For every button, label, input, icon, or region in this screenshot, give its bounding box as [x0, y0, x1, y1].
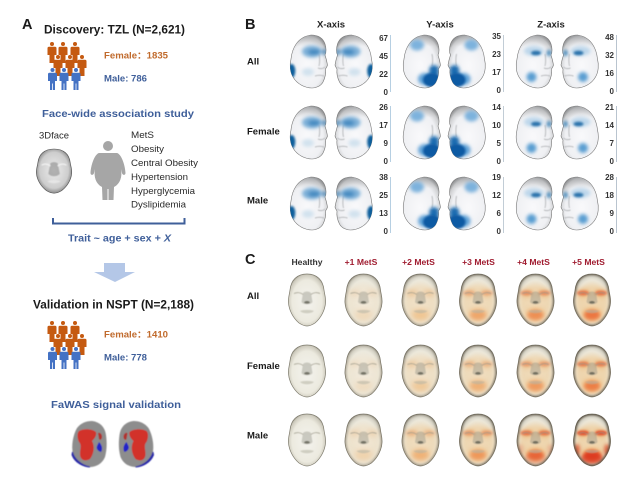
panel letter B: B: [245, 17, 255, 33]
colour scales: Z-axis: 0: [610, 227, 615, 236]
face: Female Healthy: [288, 345, 326, 397]
panel letter A: A: [22, 17, 33, 33]
faces: Y-axis Male mirrored: [448, 177, 485, 230]
faces: Y-axis All mirrored: [448, 35, 485, 88]
icon: discovery cohort people: [48, 42, 86, 90]
colour scales: Y-axis: 5: [497, 139, 502, 148]
panel letter C: C: [245, 252, 256, 268]
face: Male Healthy: [288, 414, 326, 466]
heading: FaWAS signal validation: FaWAS signal validation: [51, 399, 181, 411]
colour scales: Z-axis: 18: [605, 191, 615, 200]
colour scales: Y-axis: 6: [497, 209, 502, 218]
row label: Male: Male: [247, 430, 268, 442]
colour scales: Y-axis: 17: [492, 68, 502, 77]
face: Male +4: [517, 414, 554, 466]
colour scales: Y-axis: 0: [497, 227, 502, 236]
faces: X-axis Male: [288, 177, 328, 230]
colour scales: Y-axis: 0: [497, 86, 502, 95]
column header: +3 MetS: +3 MetS: [462, 257, 495, 267]
faces: Z-axis All: [516, 35, 554, 88]
face: Male +2: [402, 414, 439, 466]
colour scales: Y-axis: 10: [492, 121, 502, 130]
list: metabolic traits: Central Obesity: [131, 158, 198, 169]
colour scales: Y-axis: 35: [492, 32, 502, 41]
icon: validation cohort people: [48, 321, 86, 369]
list: metabolic traits: [131, 130, 198, 210]
face: Male +1: [345, 414, 382, 466]
colour scales: X-axis: 9: [384, 139, 389, 148]
faces: Y-axis Female mirrored: [448, 106, 485, 159]
list: metabolic traits: Dyslipidemia: [131, 200, 187, 210]
face: All +5: [573, 274, 611, 326]
colour scales: X-axis: 13: [379, 209, 389, 218]
column header: X-axis: X-axis: [317, 20, 345, 30]
colour scales: X-axis: 26: [379, 103, 389, 112]
face: All +3: [459, 274, 497, 326]
row label: Female: Female: [247, 126, 280, 138]
colour scales: X-axis: 0: [384, 88, 389, 97]
colour scales: Z-axis: 9: [610, 209, 615, 218]
column header: +2 MetS: +2 MetS: [402, 257, 435, 267]
colour scales: X-axis: 38: [379, 173, 389, 182]
face: Female +2: [402, 345, 439, 397]
icon: obese body silhouette: [90, 141, 126, 200]
list: metabolic traits: Obesity: [131, 144, 164, 155]
faces: X-axis Female mirrored: [335, 106, 375, 159]
column header: Healthy: Healthy: [291, 257, 323, 267]
colour scales: Z-axis: 21: [605, 103, 615, 112]
colour scales: Y-axis: 0: [497, 157, 502, 166]
colour scales: X-axis: 25: [379, 191, 389, 200]
heading: face-wide association study: Face-wide association study: [42, 108, 194, 120]
faces: Z-axis Female mirrored: [561, 106, 598, 159]
faces: X-axis All: [288, 35, 328, 88]
colour scales: Z-axis: 28: [605, 173, 615, 182]
label: male count: Male: 786: [104, 74, 147, 84]
colour scales: X-axis: [379, 34, 390, 236]
colour scales: Z-axis: 7: [610, 139, 615, 148]
colour scales: Z-axis: 32: [605, 51, 615, 60]
column header: Z-axis: Z-axis: [537, 20, 565, 30]
column header: +1 MetS: +1 MetS: [345, 257, 378, 267]
label: validation female count: Female：1410: [104, 330, 168, 340]
column header: +4 MetS: +4 MetS: [517, 257, 550, 267]
colour scales: Y-axis: 19: [492, 173, 502, 182]
colour scales: Z-axis: 0: [610, 157, 615, 166]
column header: +5 MetS: +5 MetS: [572, 257, 605, 267]
faces: X-axis Female: [288, 106, 328, 159]
colour scales: Y-axis: [492, 32, 504, 236]
face: Female +3: [459, 345, 497, 397]
colour scales: Z-axis: [605, 33, 616, 236]
face: Male +5: [573, 414, 611, 466]
row label: All: All: [247, 291, 259, 302]
colour scales: X-axis: 22: [379, 70, 389, 79]
faces: Z-axis All mirrored: [561, 35, 598, 88]
panel A: study design: [22, 17, 198, 467]
face: All +4: [517, 274, 554, 326]
face: All +1: [345, 274, 382, 326]
colour scales: Z-axis: 16: [605, 69, 615, 78]
list: metabolic traits: MetS: [131, 130, 154, 141]
faces: X-axis Male mirrored: [335, 177, 375, 230]
heading: validation cohort: Validation in NSPT (N=2,188): [33, 298, 194, 312]
list: metabolic traits: Hypertension: [131, 172, 188, 183]
colour scales: Z-axis: 48: [605, 33, 615, 42]
faces: Y-axis Male: [403, 177, 441, 230]
faces: Z-axis Male: [516, 177, 554, 230]
formula: Trait ~ age + sex + X: [68, 234, 172, 244]
panel B: axis association maps: [245, 17, 616, 236]
face: Female +4: [517, 345, 554, 397]
label: female count: Female：1835: [104, 50, 168, 60]
row label: Male: Male: [247, 196, 268, 206]
row label: All: All: [247, 56, 259, 68]
faces: Y-axis All: [403, 35, 441, 88]
colour scales: X-axis: 17: [379, 121, 389, 130]
arrow: discovery to validation: [94, 263, 135, 282]
colour scales: Z-axis: 14: [605, 121, 615, 130]
list: metabolic traits: Hyperglycemia: [131, 186, 196, 197]
colour scales: X-axis: 67: [379, 34, 389, 43]
heading: discovery cohort: Discovery: TZL (N=2,621): [44, 22, 185, 36]
colour scales: X-axis: 45: [379, 52, 389, 61]
colour scales: Y-axis: 14: [492, 103, 502, 112]
column header: Y-axis: Y-axis: [426, 20, 454, 30]
icon: gray 3D face: [36, 149, 72, 193]
label: validation male count: Male: 778: [104, 352, 147, 362]
colour scales: X-axis: 0: [384, 157, 389, 166]
panel C: MetS burden face maps: [245, 252, 611, 466]
colour scales: X-axis: 0: [384, 227, 389, 236]
faces: Y-axis Female: [403, 106, 441, 159]
faces: Z-axis Female: [516, 106, 554, 159]
label: 3Dface: 3Dface: [39, 130, 69, 142]
colour scales: Y-axis: 23: [492, 50, 502, 59]
face: Male +3: [459, 414, 497, 466]
face: Female +1: [345, 345, 382, 397]
faces: X-axis All mirrored: [335, 35, 375, 88]
face: All +2: [402, 274, 439, 326]
face: All Healthy: [288, 274, 326, 326]
colour scales: Z-axis: 0: [610, 87, 615, 96]
bracket: [53, 218, 184, 224]
icon: validation signal faces: [72, 421, 154, 467]
row label: Female: Female: [247, 361, 280, 372]
face: Female +5: [573, 345, 611, 397]
colour scales: Y-axis: 12: [492, 191, 502, 200]
faces: Z-axis Male mirrored: [561, 177, 598, 230]
